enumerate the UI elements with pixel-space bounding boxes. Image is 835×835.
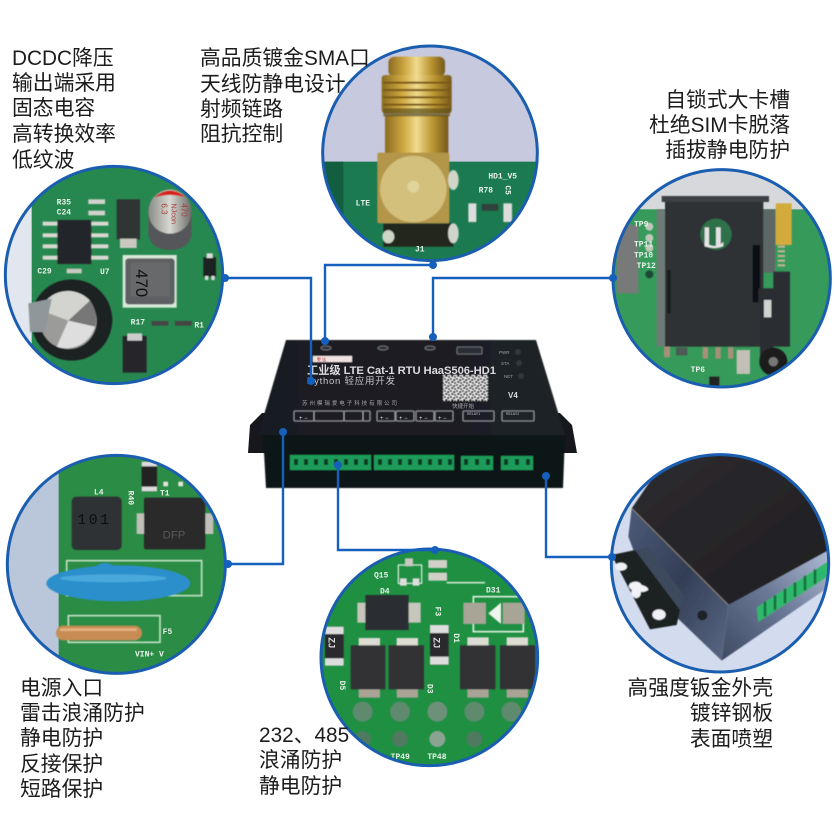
text: power input features: 雷击浪涌防护 [20, 702, 145, 725]
device printed text: STA [501, 361, 509, 366]
text: RS232 RS485 features [259, 724, 349, 798]
device printed text: 苏州模瑞爱电子科技有限公司 [302, 399, 397, 407]
device printed text: V4 [508, 391, 518, 400]
text: SIM slot features [649, 89, 790, 162]
connector: power input to device [228, 432, 283, 564]
photo circle: SIM card slot: TP11 [634, 241, 653, 250]
photo circle: SIM card slot: TP9 [634, 221, 649, 230]
device printed text: PWR [499, 350, 510, 355]
text: DCDC features: 高转换效率 [12, 123, 116, 146]
photo circle: RS232 RS485 protection: D3 [424, 684, 433, 694]
text: enclosure features [627, 677, 773, 751]
connector lines and dots [225, 265, 613, 564]
text: SIM slot features: 杜绝SIM卡脱落 [649, 114, 790, 137]
connector dots [221, 261, 617, 568]
photo circle: power input protection: DFP [163, 529, 185, 541]
QR code [443, 375, 488, 401]
top-side ports [321, 346, 482, 354]
photo circle: DCDC power circuit: U7 [100, 268, 110, 277]
photo circle: RS232 RS485 protection: D1 [451, 633, 460, 643]
device printed text: + − [299, 416, 308, 422]
device printed text: 快捷开始 [452, 402, 475, 410]
photo circle: RS232 RS485 protection: ZJ [431, 637, 441, 648]
photo circle: power input protection: L4 [94, 489, 104, 498]
connector: SMA to device [325, 265, 433, 341]
photo circle: SMA connector: J1 [415, 246, 425, 255]
device printed text: RELAY1 [467, 412, 480, 416]
photo circle: SMA connector: HD1_V5 [488, 172, 517, 181]
photo circle: SMA connector: LTE [356, 199, 370, 208]
electrolytic capacitor C25 [148, 190, 192, 250]
text: enclosure features: 镀锌钢板 [690, 702, 773, 725]
top face [258, 340, 565, 435]
photo circle: SIM card slot [610, 170, 835, 389]
photo circle: DCDC power circuit: 470 [132, 269, 151, 297]
text: RS232 RS485 features: 浪涌防护 [259, 749, 342, 772]
photo circle: DCDC power circuit: C29 [37, 267, 52, 276]
text: enclosure features: 高强度钣金外壳 [627, 677, 773, 700]
photo circle: SMA connector: C5 [502, 185, 511, 195]
photo circle: SMA connector: R78 [479, 187, 493, 196]
text: RS232 RS485 features: 232、485 [259, 724, 349, 747]
photo circle: SMA connector [320, 40, 547, 268]
photo circle: RS232 RS485 protection: TP49 [391, 753, 410, 762]
green terminal blocks [290, 455, 533, 470]
device printed text: 警 告 [317, 356, 326, 362]
text: SIM slot features: 自锁式大卡槽 [665, 89, 790, 112]
text: DCDC features [12, 47, 116, 172]
status LEDs [515, 349, 524, 379]
photo circle: power input protection: T1 [160, 489, 170, 498]
text: enclosure features: 表面喷塑 [690, 728, 773, 751]
photo circle: DCDC power circuit: R1 [194, 321, 204, 330]
text: SMA features [200, 47, 370, 146]
connector: enclosure to device [546, 476, 612, 557]
text: DCDC features: 固态电容 [12, 97, 95, 120]
photo circle: RS232 RS485 protection: D4 [380, 587, 390, 596]
photo circle: SIM card slot: TP12 [637, 262, 656, 271]
front face [263, 435, 565, 488]
photo circle: RS232 RS485 protection: D5 [337, 681, 346, 690]
device printed text: 工业级 LTE Cat-1 RTU HaaS506-HD1 [307, 363, 496, 377]
device printed text: Python 轻应用开发 [307, 375, 395, 387]
photo circle: RS232 RS485 protection: Q15 [374, 571, 389, 580]
warning label [313, 356, 352, 362]
text: RS232 RS485 features: 静电防护 [259, 775, 342, 798]
large capacitor [28, 279, 112, 361]
photo circle: power input protection [0, 450, 233, 680]
text: DCDC features: DCDC降压 [12, 47, 114, 70]
photo circle: DCDC power circuit: 470 [179, 203, 188, 217]
diode D6 [123, 333, 147, 373]
device printed text: NET [504, 374, 513, 379]
connector: DCDC to device [225, 278, 311, 381]
photo circle: SIM card slot: TP10 [634, 251, 653, 260]
photo circle: DCDC power circuit: 6.3 [159, 203, 168, 215]
photo circle: DCDC power circuit: R35 [57, 199, 71, 208]
text: power input features: 反接保护 [20, 753, 103, 776]
photo circle: SIM card slot: TP6 [691, 366, 705, 375]
photo circle: power input protection: VIN+ V [135, 651, 164, 660]
device: industrial RTU enclosure [248, 340, 577, 488]
transistor [203, 253, 216, 280]
connector: RS485 to device [338, 465, 435, 550]
device printed text: + − [380, 416, 389, 422]
photo circle: RS232 RS485 protection: F3 [432, 607, 441, 616]
text: SMA features: 天线防静电设计 [200, 73, 346, 96]
text: power input features: 短路保护 [20, 778, 103, 801]
device printed text: RELAY2 [506, 412, 519, 416]
photo circle: power input protection: R40 [126, 491, 135, 505]
device printed text [299, 350, 519, 422]
photo circle: RS232 RS485 protection: D31 [486, 587, 501, 596]
device printed text: + − [419, 416, 428, 422]
mounting ears [248, 413, 577, 453]
photo circle: metal enclosure [605, 450, 835, 677]
photo circle: power input protection: 101 [77, 513, 112, 529]
device printed text: + − [438, 416, 447, 422]
text: SIM slot features: 插拔静电防护 [665, 139, 790, 162]
text: DCDC features: 低纹波 [12, 149, 75, 172]
text: DCDC features: 输出端采用 [12, 72, 116, 95]
text: SMA features: 射频链路 [200, 98, 283, 121]
text: SMA features: 高品质镀金SMA口 [200, 47, 370, 70]
photo circle: DCDC power circuit: C24 [57, 209, 71, 218]
diode D8 [117, 199, 140, 248]
device printed text: + − [399, 416, 408, 422]
photo circle: RS232 RS485 protection: ZJ [327, 637, 337, 648]
chip U7 [43, 220, 108, 264]
photo circle: RS232 RS485 protection [320, 540, 543, 773]
inductor L2 [123, 255, 177, 308]
photo circle: DCDC power circuit [0, 163, 233, 390]
photo circle: DCDC power circuit: NJcon [169, 203, 178, 224]
photo circle: power input protection: F5 [163, 628, 172, 637]
text: power input features [20, 677, 145, 801]
text: power input features: 静电防护 [20, 727, 103, 750]
terminal label boxes [294, 411, 534, 421]
photo circle: RS232 RS485 protection: TP48 [427, 753, 447, 762]
text: power input features: 电源入口 [20, 677, 103, 700]
photo circle: DCDC power circuit: R17 [131, 319, 145, 328]
text: SMA features: 阻抗控制 [200, 123, 283, 146]
connector: SIM to device [433, 278, 613, 337]
